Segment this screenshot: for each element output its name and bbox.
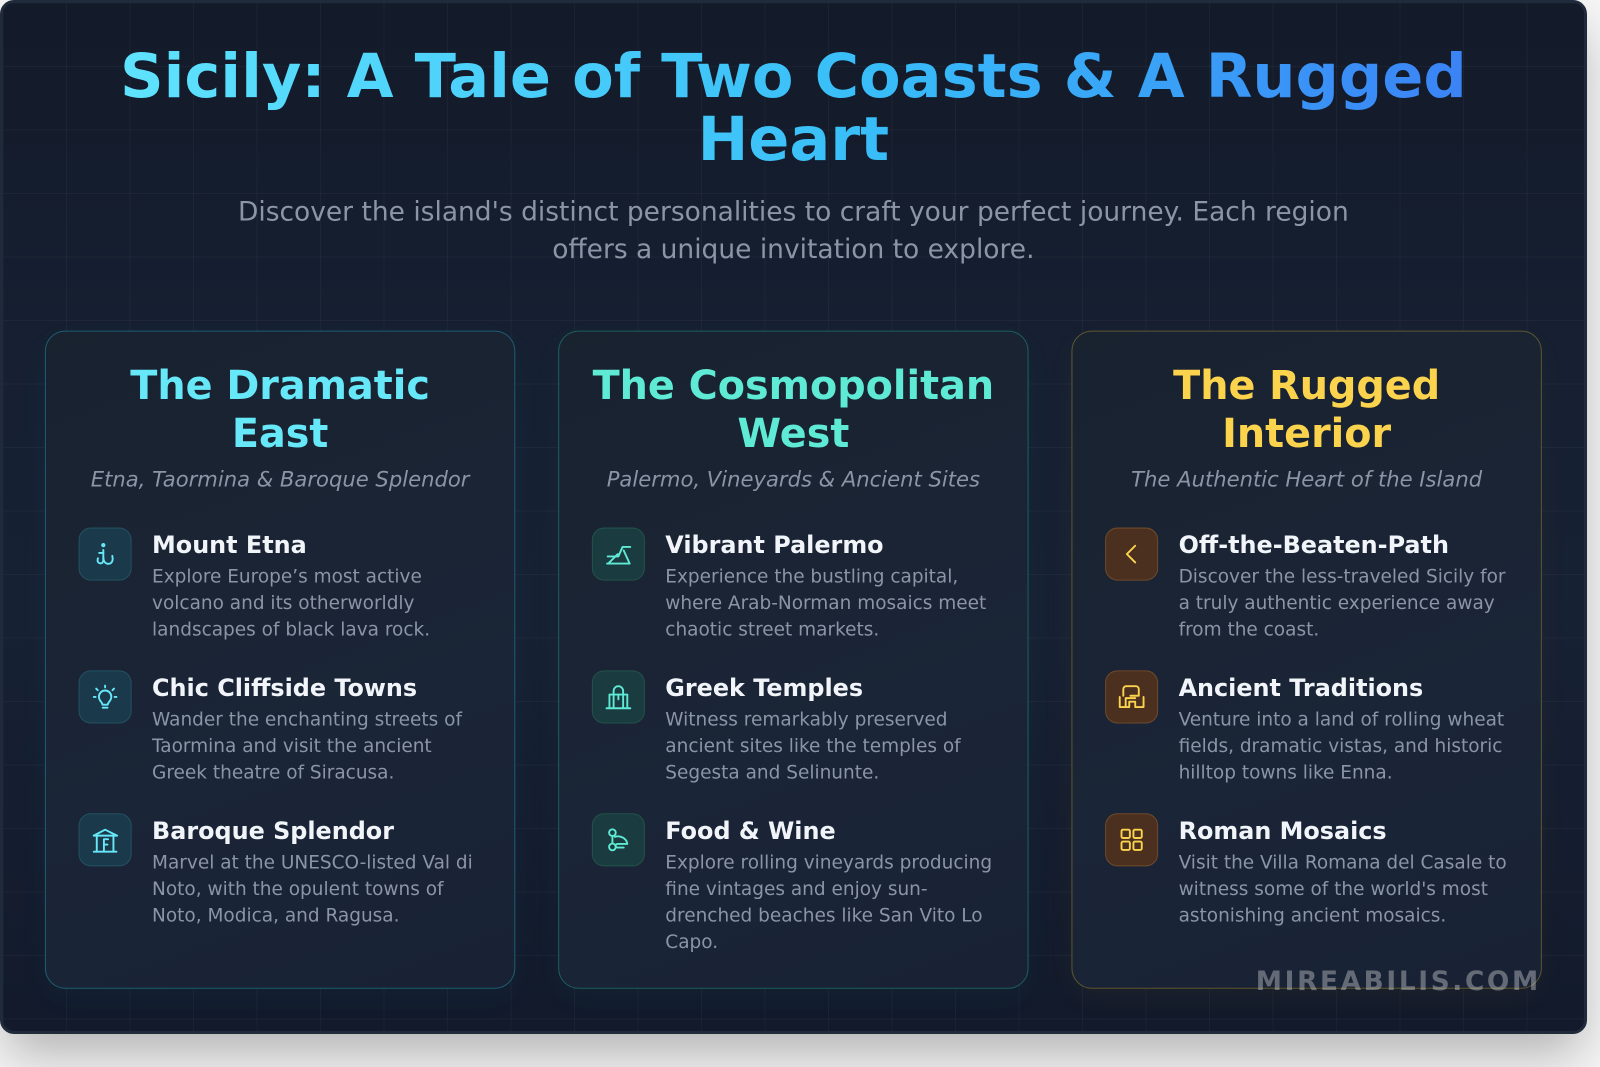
item title: Greek Temples <box>665 673 863 702</box>
item text: Wander the enchanting streets of <box>152 709 462 731</box>
item text: a truly authentic experience away <box>1179 593 1495 614</box>
subtitle <box>238 197 1349 265</box>
heading: The Dramatic East <box>130 363 430 457</box>
item text: Noto, Modica, and Ragusa. <box>152 905 399 927</box>
item title: Roman Mosaics <box>1179 816 1387 845</box>
heading: The Dramatic East: The Dramatic <box>130 363 430 409</box>
item text: Witness remarkably preserved <box>665 709 948 731</box>
heading: The Rugged Interior: Interior <box>1222 411 1391 457</box>
item title: Vibrant Palermo <box>665 531 884 559</box>
item text <box>152 852 473 927</box>
heading: The Cosmopolitan West: West <box>737 411 849 457</box>
icon: baroque building <box>78 813 131 866</box>
item text: Segesta and Selinunte. <box>665 762 879 784</box>
item: Greek Temples <box>592 670 961 784</box>
icon: anchor volcano <box>78 528 131 581</box>
item: Chic Cliffside Towns <box>78 670 462 784</box>
item: Mount Etna <box>78 528 430 641</box>
item title: Ancient Traditions <box>1179 673 1423 702</box>
item text: where Arab-Norman mosaics meet <box>665 593 986 614</box>
heading: The Dramatic East: East <box>232 411 328 457</box>
item title: Chic Cliffside Towns <box>152 673 417 702</box>
item text <box>665 709 961 784</box>
item text <box>152 709 462 784</box>
item text: Discover the less-traveled Sicily for <box>1179 566 1506 588</box>
title <box>0 45 1587 172</box>
item: Vibrant Palermo <box>592 528 986 641</box>
item text: Experience the bustling capital, <box>665 566 958 588</box>
panel: The Dramatic East <box>45 331 515 989</box>
item title: Off-the-Beaten-Path <box>1179 531 1449 559</box>
item text: ancient sites like the temples of <box>665 736 961 757</box>
item text: Venture into a land of rolling wheat <box>1179 709 1504 731</box>
item text: Marvel at the UNESCO-listed Val di <box>152 852 473 873</box>
item title: Mount Etna <box>152 531 307 559</box>
tagline: west: Palermo, Vineyards & Ancient Sites <box>607 467 980 492</box>
item text: fine vintages and enjoy sun- <box>665 879 928 900</box>
item: Food & Wine <box>592 813 992 953</box>
item text <box>665 852 992 953</box>
item text <box>1178 852 1507 927</box>
item text: hilltop towns like Enna. <box>1179 762 1393 784</box>
item: Baroque Splendor <box>78 813 473 927</box>
icon: food and wine <box>591 813 644 866</box>
item text: Explore rolling vineyards producing <box>665 852 992 873</box>
tagline: east: Etna, Taormina & Baroque Splendor <box>91 467 469 492</box>
item text <box>152 566 430 641</box>
icon: hilltop town <box>1105 670 1158 723</box>
item text: Greek theatre of Siracusa. <box>152 762 394 784</box>
icon: mosaic grid <box>1105 813 1158 866</box>
item text: landscapes of black lava rock. <box>152 619 430 641</box>
icon: temple <box>591 670 644 723</box>
heading: The Rugged Interior: The Rugged <box>1173 363 1440 409</box>
panel: The Cosmopolitan West <box>558 331 1029 989</box>
item text <box>665 566 986 641</box>
item text: drenched beaches like San Vito Lo <box>665 905 983 927</box>
icon: light bulb <box>78 670 131 723</box>
item title: Food & Wine <box>665 816 836 845</box>
item text: astonishing ancient mosaics. <box>1179 905 1446 927</box>
item text: Explore Europe’s most active <box>152 566 422 588</box>
title: Sicily: A Tale of Two Coasts & A Rugged <box>120 41 1467 112</box>
subtitle: Discover the island's distinct personalities to craft your perfect journey. Each region <box>238 197 1349 228</box>
heading: The Cosmopolitan West: The Cosmopolitan <box>593 363 994 409</box>
item text: volcano and its otherworldly <box>152 593 414 614</box>
item text: from the coast. <box>1179 619 1319 641</box>
item text: witness some of the world's most <box>1179 879 1488 900</box>
panel: The Rugged Interior <box>1071 331 1542 989</box>
title: Heart <box>698 105 889 175</box>
heading: The Rugged Interior <box>1173 363 1440 457</box>
item text: Noto, with the opulent towns of <box>152 879 444 900</box>
item text: Visit the Villa Romana del Casale to <box>1179 852 1507 873</box>
item text <box>1179 566 1506 641</box>
subtitle: offers a unique invitation to explore. <box>552 234 1035 265</box>
item text: Capo. <box>665 932 718 953</box>
item: Roman Mosaics <box>1105 813 1507 927</box>
item text: chaotic street markets. <box>665 619 879 641</box>
item: Off-the-Beaten-Path <box>1105 528 1506 641</box>
icon: chevron left <box>1105 528 1158 581</box>
icon: market stall <box>591 528 644 581</box>
item text: Taormina and visit the ancient <box>152 736 432 757</box>
item title: Baroque Splendor <box>152 816 394 845</box>
item text <box>1178 709 1504 784</box>
tagline: interior: The Authentic Heart of the Island <box>1131 467 1482 492</box>
item text: fields, dramatic vistas, and historic <box>1179 736 1502 757</box>
heading: The Cosmopolitan West <box>592 363 994 457</box>
watermark: MIREABILIS.COM <box>1256 966 1541 997</box>
item: Ancient Traditions <box>1105 670 1504 784</box>
